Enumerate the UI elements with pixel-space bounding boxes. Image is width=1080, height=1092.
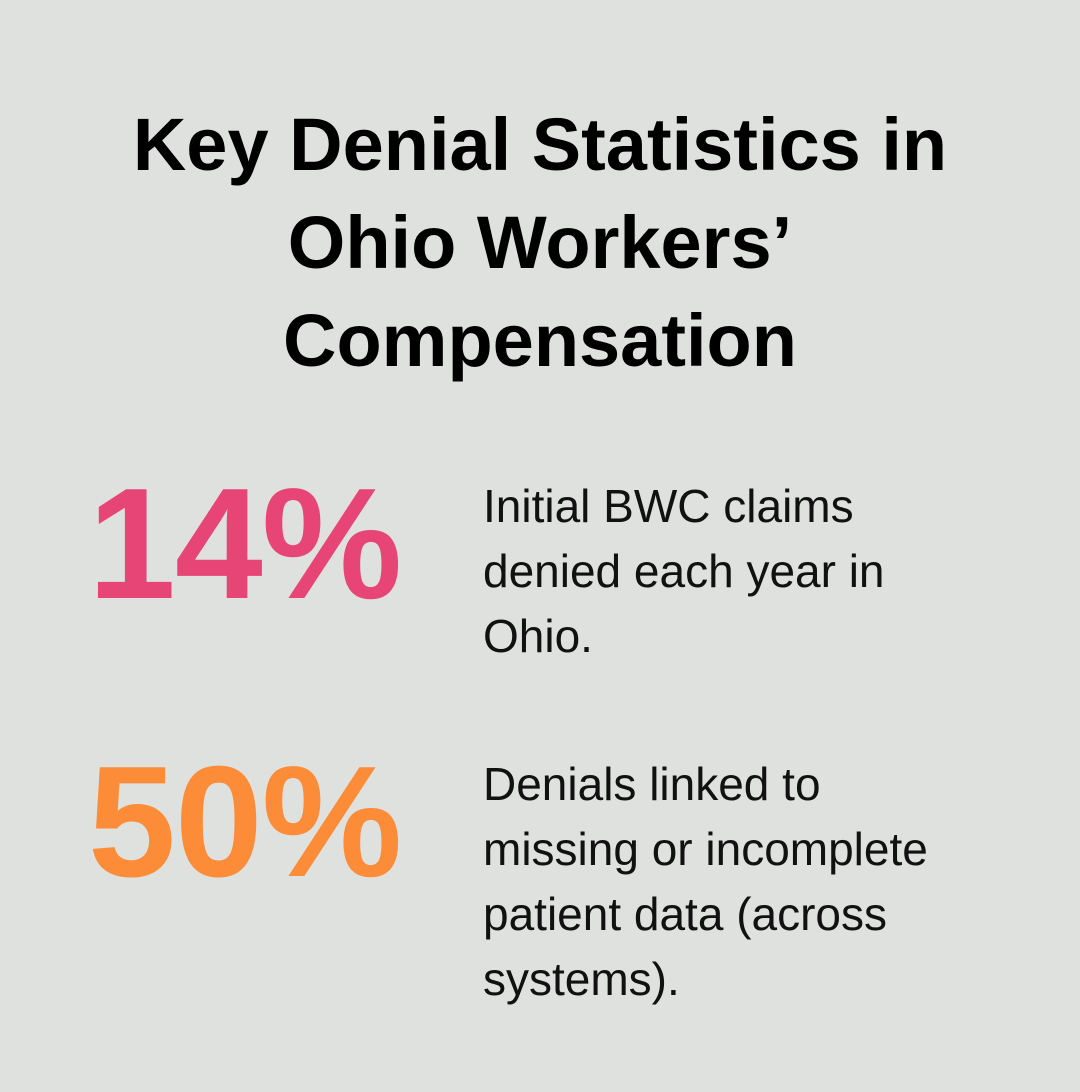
- text: 50% description: patient data (across: [483, 888, 887, 940]
- title: Key Denial Statistics in: [133, 103, 947, 186]
- title: Compensation: [283, 299, 797, 382]
- text: 14% description: denied each year in: [483, 545, 885, 597]
- text: 50% description: [483, 758, 928, 1005]
- text: 14% description: Ohio.: [483, 610, 593, 662]
- title: [133, 103, 947, 382]
- text: 50% description: Denials linked to: [483, 758, 821, 810]
- text: 14% description: Initial BWC claims: [483, 480, 854, 532]
- stat: 50%: 50%: [88, 734, 401, 910]
- title: Ohio Workers’: [288, 201, 792, 284]
- text: 50% description: systems).: [483, 953, 680, 1005]
- text: 50% description: missing or incomplete: [483, 823, 928, 875]
- text: 14% description: [483, 480, 885, 662]
- stat: 14%: 14%: [88, 456, 401, 632]
